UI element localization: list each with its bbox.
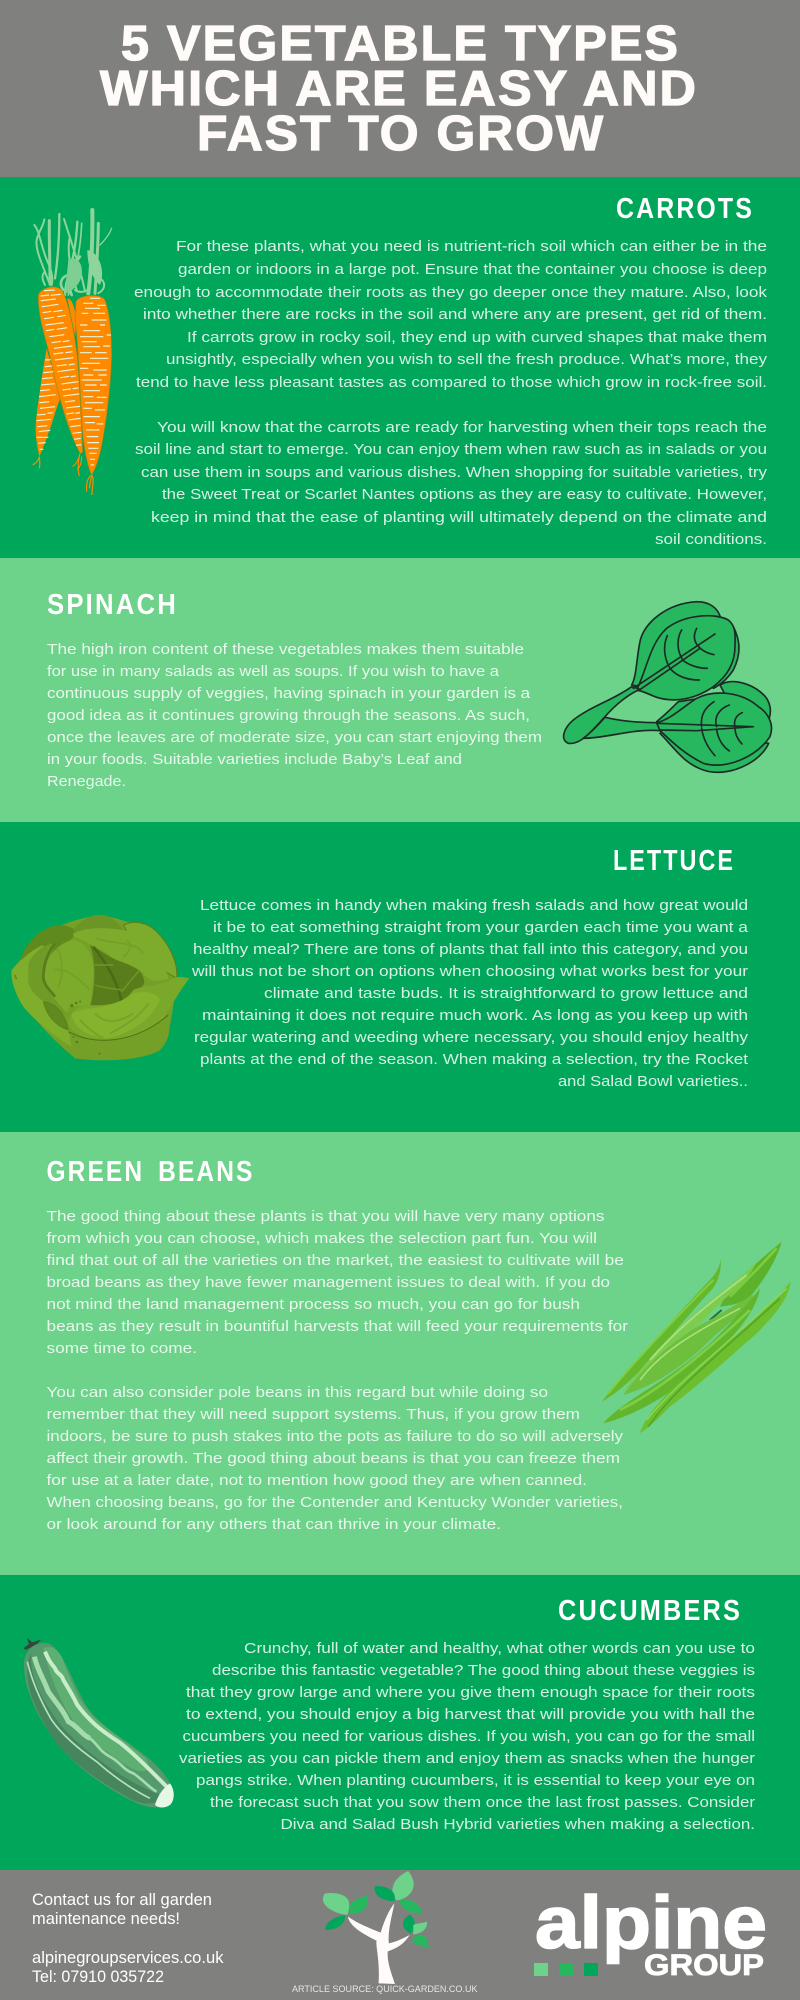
text block: spinach: continuous supply of veggies, having spinach in your garden is a (47, 685, 531, 702)
text block: carrots: For these plants, what you need is nutrient-rich soil which can either be in the (176, 238, 767, 255)
contact text: Contact us for all garden (32, 1891, 212, 1909)
title: WHICH ARE EASY AND (100, 62, 698, 116)
logo: alpine group: alpine (535, 1881, 767, 1964)
text block: green beans: some time to come. (46, 1340, 197, 1357)
text block: spinach: The high iron content of these vegetables makes them suitable (47, 641, 524, 658)
text block: lettuce: regular watering and weeding where necessary, you should enjoy healthy (194, 1029, 749, 1046)
heading: lettuce: LETTUCE (613, 845, 735, 877)
logo: alpine group: GROUP (644, 1949, 764, 1982)
contact text: Tel: 07910 035722 (32, 1968, 164, 1986)
text block: lettuce: and Salad Bowl varieties.. (558, 1073, 748, 1090)
carrot roots (33, 453, 93, 495)
text block: carrots: keep in mind that the ease of planting will ultimately depend on the climate and (151, 509, 767, 526)
text block: carrots: You will know that the carrots are ready for harvesting when their tops reach the (157, 419, 767, 436)
title (100, 17, 698, 161)
text block: green beans: remember that they will need support systems. Thus, if you grow them (46, 1406, 580, 1423)
text block: carrots: into whether there are rocks in the soil and where any are present, get rid of them. (143, 306, 767, 323)
title: 5 VEGETABLE TYPES (121, 17, 680, 71)
text block: lettuce (191, 897, 749, 1090)
text block: carrots: can use them in soups and various dishes. When shopping for suitable varieties, try (141, 464, 768, 481)
panel: footer (0, 1870, 800, 2000)
icon: carrots (33, 210, 112, 495)
text block: green beans: broad beans as they have fewer management issues to deal with. If you do (46, 1274, 610, 1291)
text block: carrots: soil line and start to emerge. You can enjoy them when raw such as in salads or you (135, 441, 767, 458)
text block: carrots: soil conditions. (655, 531, 767, 548)
text block: spinach: good idea as it continues growing through the seasons. As such, (47, 707, 530, 724)
text block: lettuce: Lettuce comes in handy when making fresh salads and how great would (200, 897, 748, 914)
text block: cucumbers: pangs strike. When planting cucumbers, it is essential to keep your eye on (196, 1772, 755, 1789)
text block: green beans: affect their growth. The good thing about beans is that you can freeze them (46, 1450, 620, 1467)
text block: lettuce: healthy meal? There are tons of plants that fall into this category, and you (193, 941, 748, 958)
text block: spinach: in your foods. Suitable varieties include Baby’s Leaf and (47, 751, 462, 768)
text block: spinach: Renegade. (47, 773, 126, 790)
heading: carrots: CARROTS (616, 193, 754, 225)
icon: cucumber (24, 1638, 174, 1807)
text block: cucumbers: to extend, you should enjoy a big harvest that will provide you with hall the (186, 1706, 755, 1723)
text block: carrots: garden or indoors in a large pot. Ensure that the container you choose is deep (178, 261, 767, 278)
text block: green beans: for use at a later date, not to mention how good they are when canned. (46, 1472, 587, 1489)
article source: ARTICLE SOURCE: QUICK-GARDEN.CO.UK (292, 1984, 478, 1994)
contact text (32, 1891, 224, 1986)
contact text: maintenance needs! (32, 1910, 180, 1928)
text block: carrots: enough to accommodate their roots as they go deeper once they mature. Also, look (134, 284, 768, 301)
icon: lettuce (11, 915, 189, 1060)
panel: green beans (0, 1132, 800, 1575)
heading: cucumbers: CUCUMBERS (558, 1595, 742, 1627)
heading: green beans: GREEN BEANS (46, 1156, 254, 1188)
icon: green beans (602, 1242, 791, 1433)
panel: lettuce (0, 822, 800, 1132)
text block: cucumbers: that they grow large and where you give them enough space for their roots (186, 1684, 755, 1701)
text block: green beans: The good thing about these plants is that you will have very many options (46, 1208, 604, 1225)
text block: green beans: When choosing beans, go for the Contender and Kentucky Wonder varieties, (46, 1494, 623, 1511)
panel: carrots (0, 177, 800, 558)
text block: green beans: beans as they result in bountiful harvests that will feed your requirements for (46, 1318, 628, 1335)
text block: lettuce: maintaining it does not require much work. As long as you keep up with (202, 1007, 748, 1024)
title: FAST TO GROW (197, 107, 605, 161)
text block: spinach: for use in many salads as well as soups. If you wish to have a (47, 663, 500, 680)
icon: tree (323, 1871, 429, 1984)
text block: lettuce: will thus not be short on options when choosing what works best for your (191, 963, 748, 980)
text block: carrots (134, 238, 768, 548)
text block: green beans: from which you can choose, which makes the selection part fun. You will (46, 1230, 597, 1247)
text block: cucumbers: describe this fantastic vegetable? The good thing about these veggies is (212, 1662, 755, 1679)
text block: carrots: unsightly, especially when you wish to sell the fresh produce. What’s more, they (166, 351, 768, 368)
text block: lettuce: plants at the end of the season. When making a selection, try the Rocket (200, 1051, 749, 1068)
icon: spinach leaves (564, 602, 771, 772)
text block: carrots: the Sweet Treat or Scarlet Nantes options as they are easy to cultivate. However, (162, 486, 767, 503)
text block: lettuce: it be to eat something straight from your garden each time you want a (213, 919, 749, 936)
text block: carrots: If carrots grow in rocky soil, they end up with curved shapes that make them (187, 329, 767, 346)
text block: green beans: or look around for any others that can thrive in your climate. (46, 1516, 501, 1533)
text block: carrots: tend to have less pleasant tastes as compared to those which grow in rock-free soil. (136, 374, 767, 391)
text block: cucumbers: cucumbers you need for various dishes. If you wish, you can go for the small (182, 1728, 755, 1745)
text block: green beans (46, 1208, 628, 1533)
text block: green beans: find that out of all the varieties on the market, the easiest to cultivate will be (46, 1252, 624, 1269)
panel: cucumbers (0, 1575, 800, 1870)
text block: cucumbers (179, 1640, 755, 1833)
text block: cucumbers: varieties as you can pickle them and enjoy them as snacks when the hunger (179, 1750, 755, 1767)
contact text: alpinegroupservices.co.uk (32, 1949, 224, 1967)
text block: spinach (47, 641, 542, 790)
title banner (0, 0, 800, 177)
panel: spinach (0, 558, 800, 822)
text block: cucumbers: the forecast such that you sow them once the last frost passes. Consider (210, 1794, 755, 1811)
text block: green beans: You can also consider pole beans in this regard but while doing so (46, 1384, 548, 1401)
text block: cucumbers: Crunchy, full of water and healthy, what other words can you use to (244, 1640, 755, 1657)
text block: cucumbers: Diva and Salad Bush Hybrid varieties when making a selection. (280, 1816, 755, 1833)
text block: green beans: not mind the land management process so much, you can go for bush (46, 1296, 580, 1313)
heading: spinach: SPINACH (47, 589, 178, 621)
text block: spinach: once the leaves are of moderate size, you can start enjoying them (47, 729, 542, 746)
text block: green beans: indoors, be sure to push stakes into the pots as failure to do so will adversely (46, 1428, 624, 1445)
text block: lettuce: climate and taste buds. It is straightforward to grow lettuce and (264, 985, 748, 1002)
